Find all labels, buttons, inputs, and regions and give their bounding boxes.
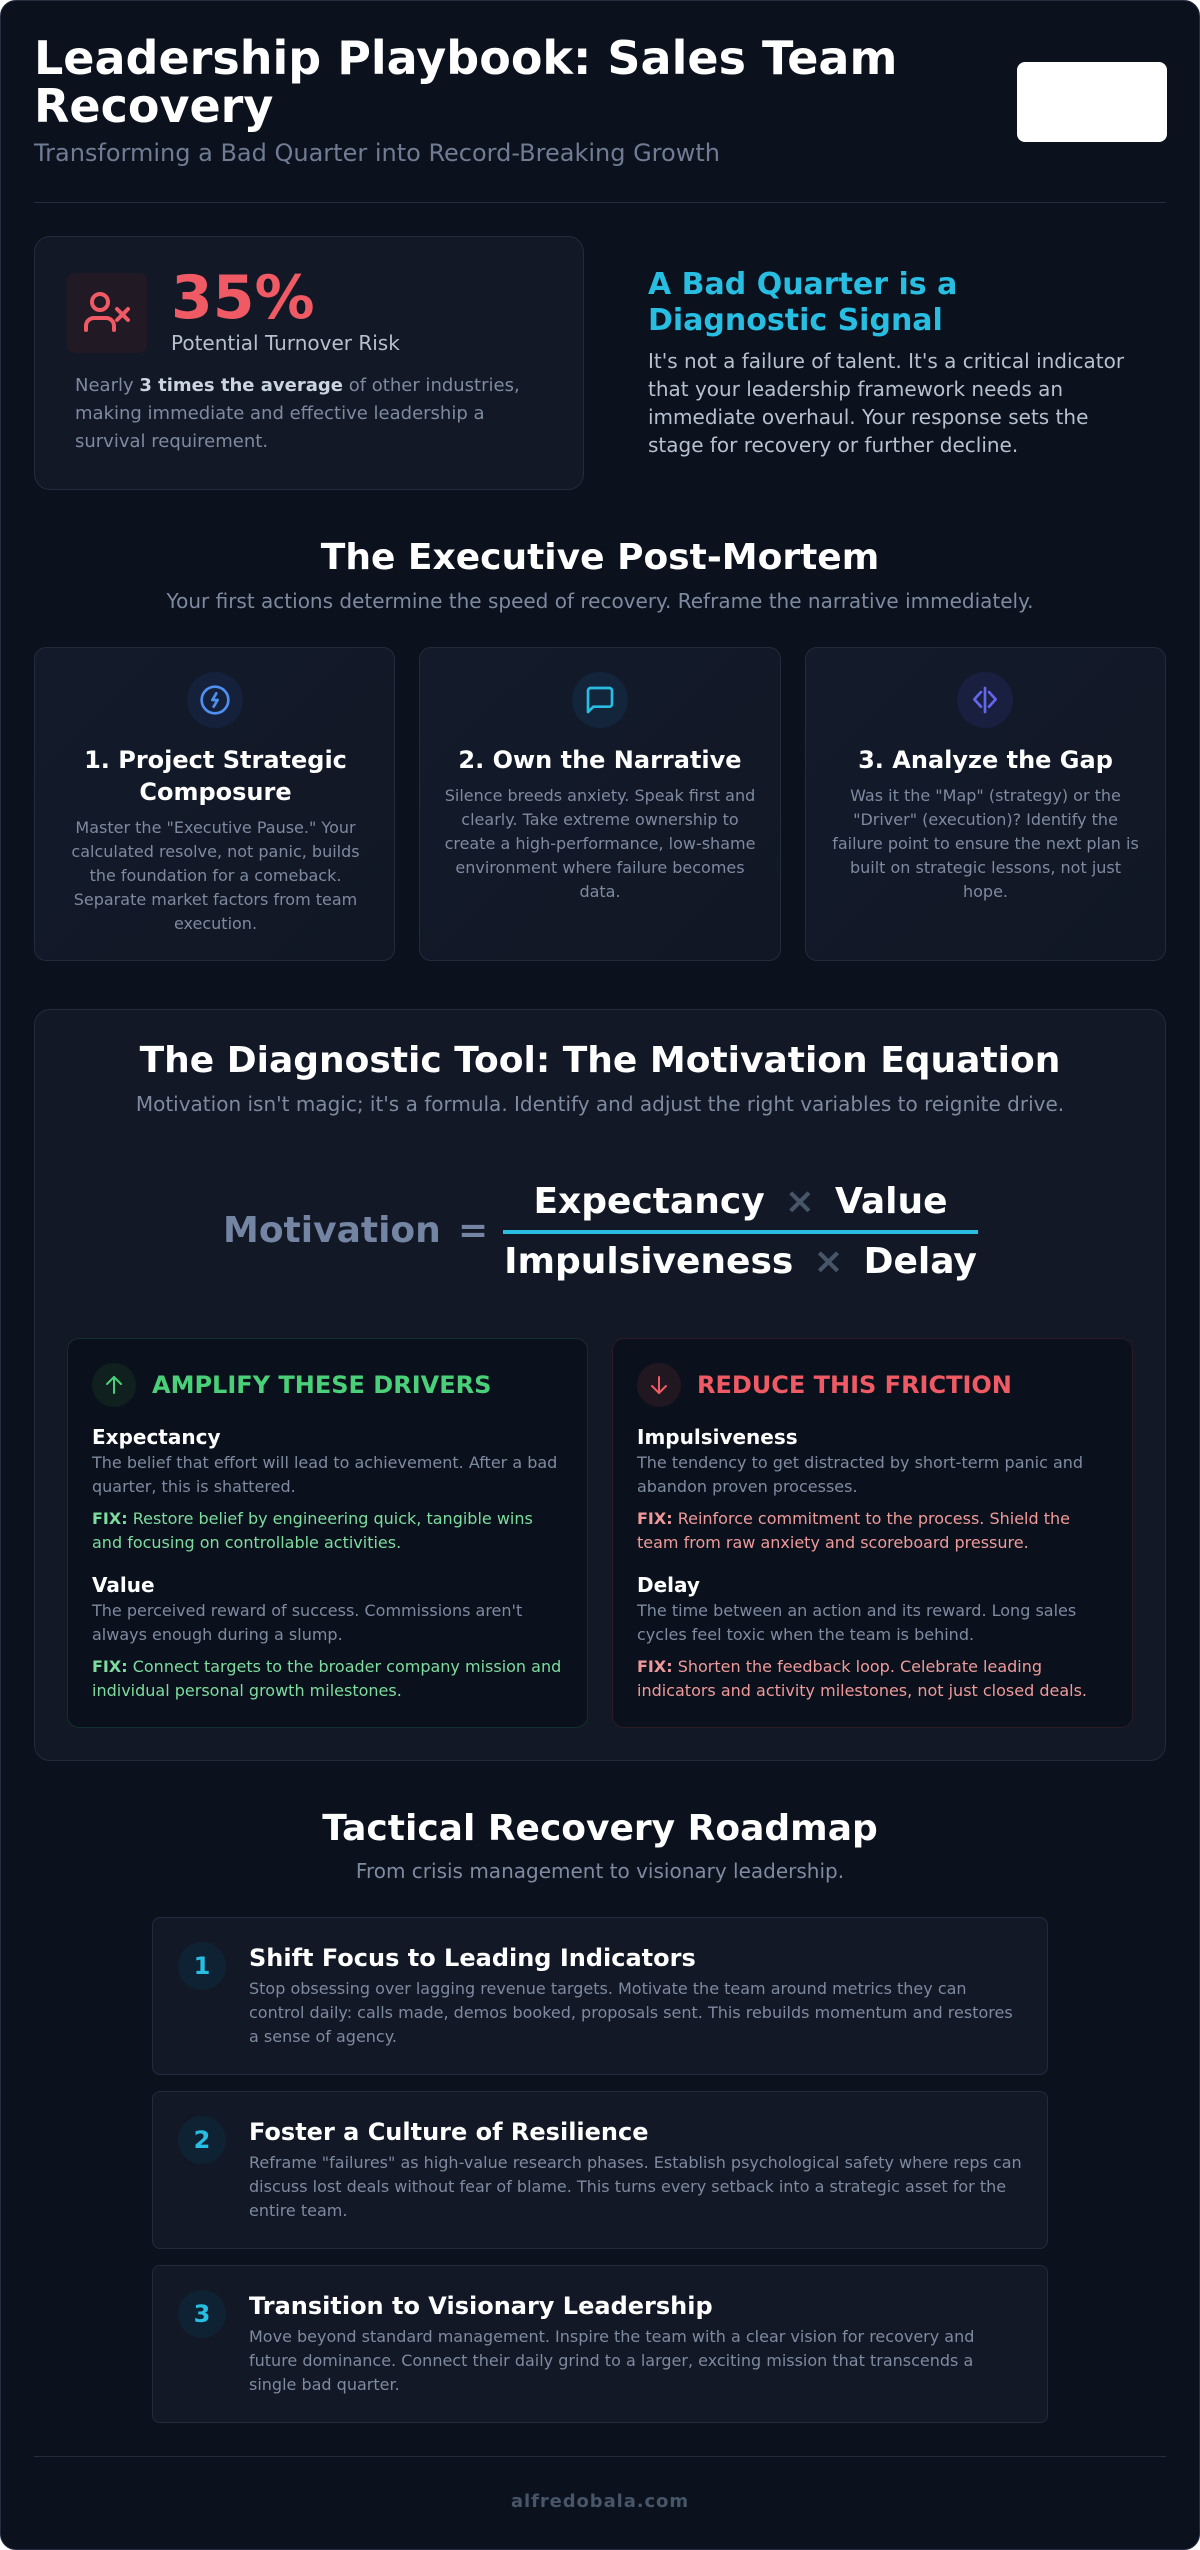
card 3 text: failure point to ensure the next plan is [832, 834, 1139, 853]
card 1 text: calculated resolve, not panic, builds [71, 842, 360, 861]
footer: alfredobala.com [511, 2491, 689, 2512]
step 1 badge [178, 1942, 226, 1990]
card 2 text [445, 786, 755, 901]
diagnostic signal heading: Diagnostic Signal [648, 303, 943, 338]
card 1 text: Master the "Executive Pause." Your [75, 818, 356, 837]
subtitle: Transforming a Bad Quarter into Record-Breaking Growth [34, 139, 720, 167]
driver: expectancy: The belief that effort will lead to achievement. After a bad [92, 1453, 557, 1472]
friction: delay: indicators and activity milestones, not just closed deals. [637, 1681, 1087, 1700]
driver: expectancy [92, 1425, 557, 1552]
reduce heading: REDUCE THIS FRICTION [697, 1371, 1012, 1399]
stat description: survival requirement. [75, 431, 268, 452]
diagnostic signal heading [648, 267, 957, 338]
title: Leadership Playbook: Sales Team [34, 31, 897, 85]
card 3 text: hope. [963, 882, 1008, 901]
heading: post-mortem: The Executive Post-Mortem [321, 537, 879, 578]
step 3 text: future dominance. Connect their daily grind to a larger, exciting mission that transcends a [249, 2351, 973, 2370]
icon: arrow down [637, 1363, 681, 1407]
panel: motivation equation [34, 1009, 1166, 1761]
driver: value: individual personal growth milestones. [92, 1681, 402, 1700]
card 2 text: data. [579, 882, 621, 901]
step 3 text [249, 2327, 974, 2394]
stat label: Potential Turnover Risk [171, 331, 400, 355]
panel: amplify drivers [67, 1338, 588, 1728]
logo placeholder [1017, 62, 1167, 142]
diagnostic signal text: It's not a failure of talent. It's a critical indicator [648, 349, 1124, 373]
card 2 title: 2. Own the Narrative [458, 746, 742, 774]
equation: = [458, 1210, 488, 1251]
title [34, 31, 897, 133]
stat number: 35% [171, 263, 315, 333]
roadmap step 1 [152, 1917, 1048, 2075]
driver: expectancy: quarter, this is shattered. [92, 1477, 296, 1496]
step 1 title: Shift Focus to Leading Indicators [249, 1944, 696, 1972]
driver: value: Value [92, 1573, 155, 1597]
card 3 text: built on strategic lessons, not just [850, 858, 1121, 877]
step 1 text: Stop obsessing over lagging revenue targets. Motivate the team around metrics they can [249, 1979, 967, 1998]
friction: delay: FIX: Shorten the feedback loop. Celebrate leading [637, 1657, 1042, 1676]
panel: turnover stat [34, 236, 584, 490]
roadmap step 2 [152, 2091, 1048, 2249]
card 1 text: the foundation for a comeback. [90, 866, 341, 885]
card 1 title [84, 746, 347, 806]
card 1 title: Composure [139, 778, 292, 806]
post-mortem subtitle: Your first actions determine the speed of recovery. Reframe the narrative immediately. [167, 589, 1033, 613]
card 3 text: "Driver" (execution)? Identify the [853, 810, 1118, 829]
card 2 text: environment where failure becomes [455, 858, 745, 877]
step 3 text: single bad quarter. [249, 2375, 400, 2394]
icon: split diamond [957, 672, 1013, 728]
step 3 badge: 3 [194, 2300, 210, 2328]
step 2 badge: 2 [194, 2126, 210, 2154]
diagnostic signal text [648, 349, 1124, 457]
friction: delay: cycles feel toxic when the team is behind. [637, 1625, 974, 1644]
card 1 text [71, 818, 360, 933]
icon: speech bubble [572, 672, 628, 728]
card 1 text: Separate market factors from team [74, 890, 357, 909]
panel: card 3 [805, 647, 1166, 961]
diagnostic signal text: that your leadership framework needs an [648, 377, 1063, 401]
friction: delay: The time between an action and its reward. Long sales [637, 1601, 1076, 1620]
diagnostic signal text: stage for recovery or further decline. [648, 433, 1018, 457]
card 1 title: 1. Project Strategic [84, 746, 347, 774]
icon: bolt [187, 672, 243, 728]
friction: impulsiveness: team from raw anxiety and scoreboard pressure. [637, 1533, 1029, 1552]
roadmap subtitle: From crisis management to visionary leadership. [356, 1859, 844, 1883]
friction: delay [636, 1573, 1087, 1700]
step 1 text: control daily: calls made, demos booked, proposals sent. This rebuilds momentum and restores [249, 2003, 1013, 2022]
icon: arrow up [92, 1363, 136, 1407]
card 3 text [832, 786, 1139, 901]
equation: Motivation [223, 1210, 441, 1251]
panel: card 1 [34, 647, 395, 961]
step 2 text: Reframe "failures" as high-value research phases. Establish psychological safety where reps can [249, 2153, 1022, 2172]
driver: expectancy: FIX: Restore belief by engineering quick, tangible wins [92, 1509, 533, 1528]
step 2 text: entire team. [249, 2201, 347, 2220]
driver: expectancy: and focusing on controllable activities. [92, 1533, 401, 1552]
diagnostic signal heading: A Bad Quarter is a [648, 267, 957, 302]
friction: impulsiveness: The tendency to get distracted by short-term panic and [637, 1453, 1083, 1472]
stat description [75, 375, 520, 452]
roadmap step 3 [152, 2265, 1048, 2423]
card 3 text: Was it the "Map" (strategy) or the [850, 786, 1121, 805]
step 2 text: discuss lost deals without fear of blame. This turns every setback into a strategic asset for the [249, 2177, 1006, 2196]
equation: Expectancy × Value [533, 1181, 948, 1222]
equation [223, 1181, 978, 1282]
step 1 text [249, 1979, 1013, 2046]
stat description: making immediate and effective leadership a [75, 403, 485, 424]
heading: diagnostic tool: The Diagnostic Tool: The Motivation Equation [140, 1040, 1060, 1081]
heading: roadmap: Tactical Recovery Roadmap [322, 1808, 878, 1849]
equation: Impulsiveness × Delay [504, 1241, 977, 1282]
step 3 text: Move beyond standard management. Inspire the team with a clear vision for recovery and [249, 2327, 974, 2346]
friction: impulsiveness: Impulsiveness [637, 1425, 798, 1449]
driver: value: always enough during a slump. [92, 1625, 343, 1644]
driver: value [92, 1573, 561, 1700]
panel: card 2 [419, 647, 781, 961]
step 1 text: a sense of agency. [249, 2027, 397, 2046]
panel: reduce friction [612, 1338, 1133, 1728]
amplify heading: AMPLIFY THESE DRIVERS [152, 1371, 491, 1399]
step 3 title: Transition to Visionary Leadership [249, 2292, 713, 2320]
friction: impulsiveness: FIX: Reinforce commitment to the process. Shield the [637, 1509, 1070, 1528]
card 2 text: clearly. Take extreme ownership to [461, 810, 739, 829]
step 2 text [249, 2153, 1022, 2220]
diagnostic signal text: immediate overhaul. Your response sets the [648, 405, 1088, 429]
card 1 text: execution. [174, 914, 257, 933]
icon: user x [67, 273, 147, 353]
step 2 badge [178, 2116, 226, 2164]
card 3 title: 3. Analyze the Gap [858, 746, 1113, 774]
step 3 badge [178, 2290, 226, 2338]
driver: expectancy: Expectancy [92, 1425, 220, 1449]
step 1 badge: 1 [194, 1952, 210, 1980]
card 2 text: create a high-performance, low-shame [445, 834, 755, 853]
driver: value: FIX: Connect targets to the broader company mission and [92, 1657, 561, 1676]
friction: impulsiveness [636, 1425, 1083, 1552]
card 2 text: Silence breeds anxiety. Speak first and [445, 786, 755, 805]
diagnostic subtitle: Motivation isn't magic; it's a formula. Identify and adjust the right variables to reignite drive. [136, 1092, 1064, 1116]
step 2 title: Foster a Culture of Resilience [249, 2118, 649, 2146]
title: Recovery [34, 79, 273, 133]
friction: delay: Delay [637, 1573, 700, 1597]
friction: impulsiveness: abandon proven processes. [637, 1477, 858, 1496]
stat description: Nearly 3 times the average of other industries, [75, 375, 520, 396]
driver: value: The perceived reward of success. Commissions aren't [92, 1601, 522, 1620]
